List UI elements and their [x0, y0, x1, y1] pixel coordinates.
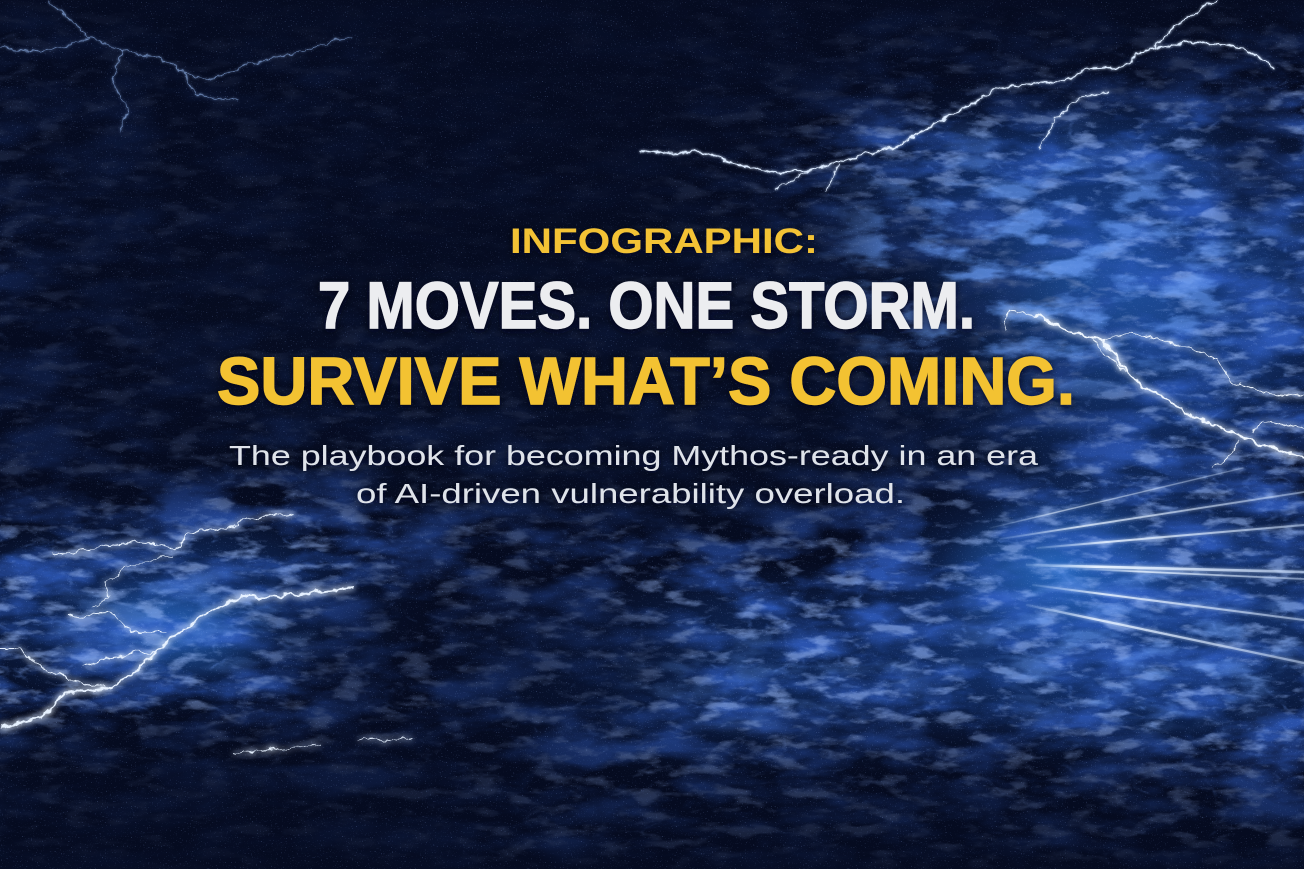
- lightning: right strike: [1005, 310, 1304, 468]
- ray 1: [990, 468, 1243, 528]
- subtitle: The playbook for becoming Mythos-ready in an era: [229, 440, 1039, 471]
- ray 5: [1033, 585, 1304, 620]
- light rays: [990, 468, 1304, 663]
- ray 3: [1037, 525, 1304, 548]
- eyebrow: infographic: INFOGRAPHIC:: [510, 222, 818, 261]
- subtitle: [229, 440, 1039, 509]
- subtitle: of AI-driven vulnerability overload.: [356, 478, 905, 509]
- lightning: top right: [640, 0, 1276, 192]
- ray 4b: [1083, 569, 1304, 579]
- bright cloud masses: [50, 114, 1304, 736]
- title line 1: 7 MOVES. ONE STORM.: [318, 268, 975, 342]
- title line 2: SURVIVE WHAT’S COMING.: [217, 344, 1075, 419]
- lightning: top left: [0, 0, 352, 132]
- ray 2: [1000, 492, 1304, 539]
- ray 6: [1027, 605, 1304, 663]
- lightning: bottom left: [0, 513, 412, 753]
- ray 4: [1027, 565, 1304, 572]
